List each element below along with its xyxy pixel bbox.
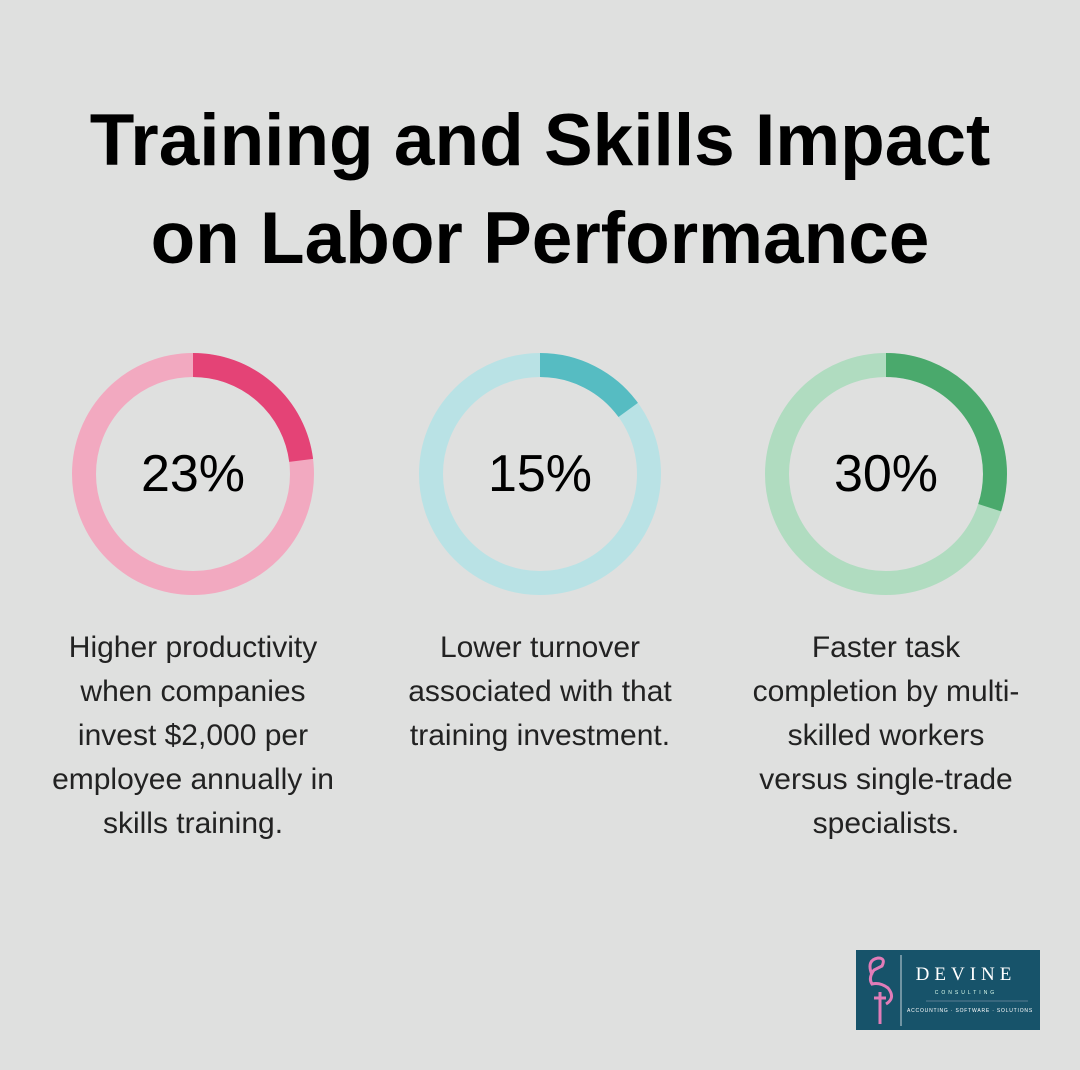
donut: 15%: 15% [488, 445, 592, 503]
text: 30%: completion by multi- [753, 675, 1019, 708]
donut: 30%: 30% [834, 445, 938, 503]
text: 30% [753, 631, 1019, 840]
logo: DEVINE [916, 964, 1016, 985]
text: 23%: Higher productivity when companies invest $2,000 per employee annually in skills training. [52, 631, 334, 840]
logo [856, 950, 1040, 1030]
title: on Labor Performance [151, 198, 929, 279]
donut: 23%: 23% [141, 445, 245, 503]
donut: 23% [72, 353, 314, 595]
donut: 15% [419, 353, 661, 595]
text: 15%: Lower turnover associated with that training investment. [408, 631, 672, 752]
donut: 30% [765, 353, 1007, 595]
title: Training and Skills Impact [90, 100, 990, 181]
text: 30%: versus single-trade [759, 763, 1013, 796]
text: 30%: skilled workers [788, 719, 984, 752]
logo: ACCOUNTING · SOFTWARE · SOLUTIONS [907, 1008, 1033, 1014]
title [90, 100, 990, 279]
text: 30%: Faster task [812, 631, 960, 664]
text: 30%: specialists. [813, 807, 959, 840]
logo: CONSULTING [935, 990, 997, 996]
